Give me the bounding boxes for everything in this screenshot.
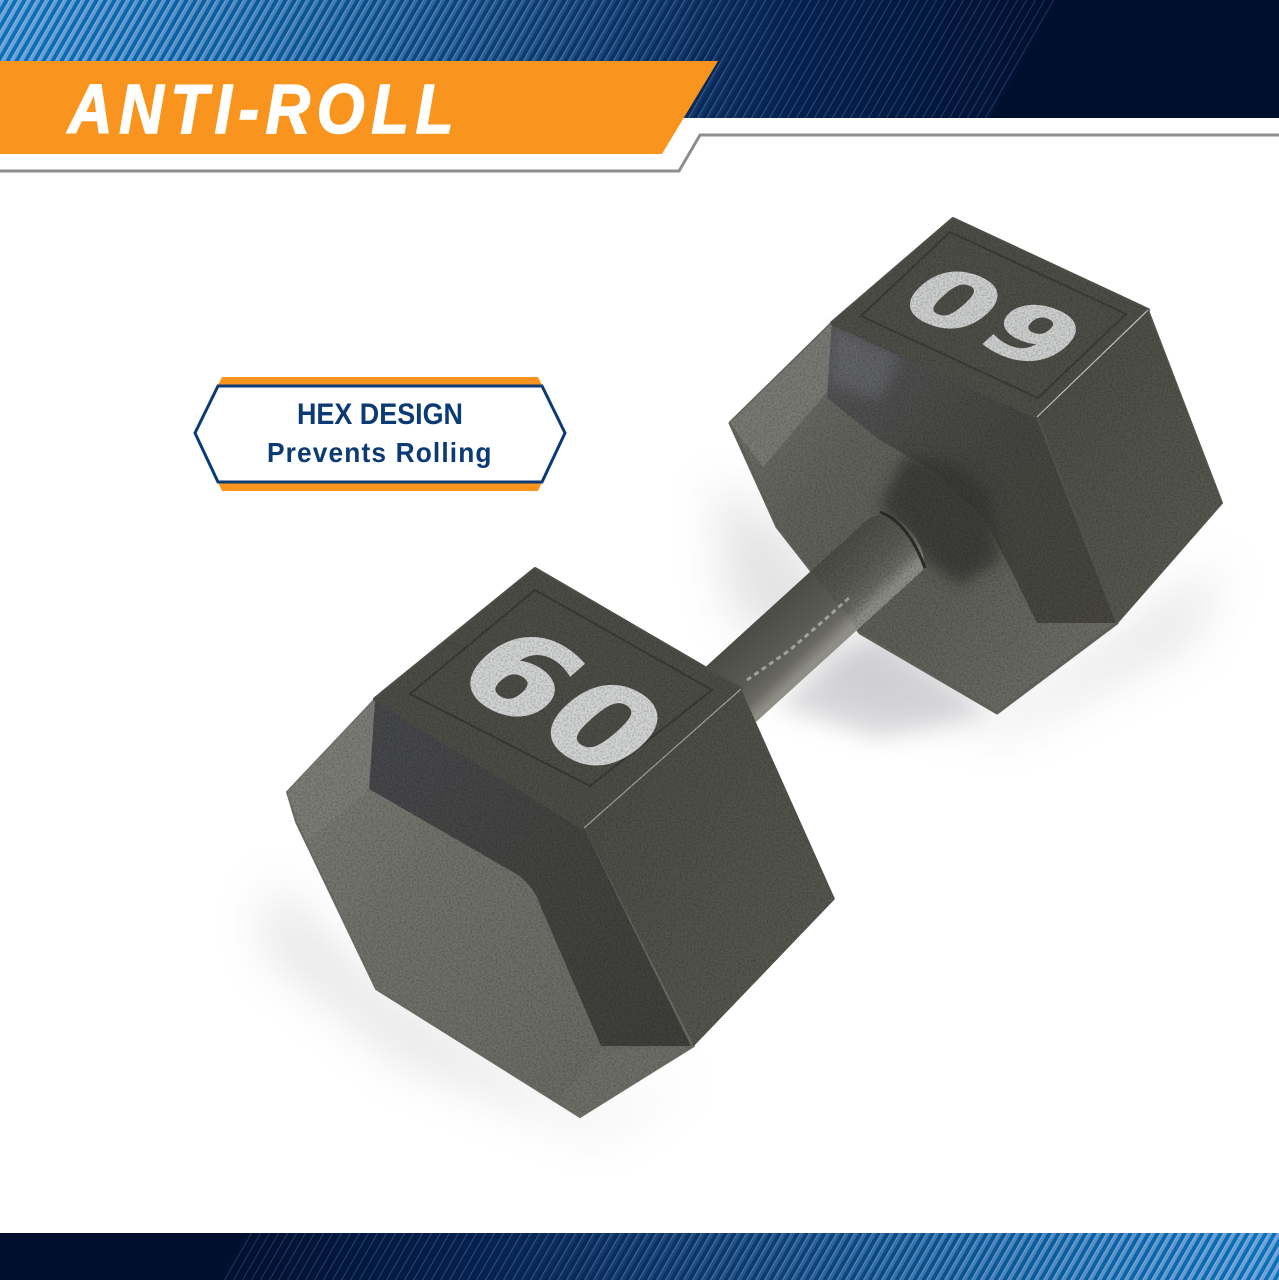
callout subheading: Prevents Rolling [267,436,493,468]
upper head chamfer [827,323,1117,623]
lower head left facet [287,699,375,842]
bar [700,512,925,732]
bar glint [747,597,850,680]
upper head chamfer sheen [830,325,900,400]
lower head top face [375,569,741,828]
callout [195,377,565,491]
cast iron texture [287,219,1222,1117]
bar socket [880,512,925,568]
upper hex head [730,219,1222,713]
callout hexagon [195,386,565,482]
lower head number: 60 [426,604,699,800]
upper head side face [1037,310,1222,623]
title banner [0,61,718,154]
upper head recess [861,232,1126,398]
floor shadows [265,480,1225,1135]
lower head side face [584,689,835,1046]
upper head top face [832,219,1148,417]
header band [0,0,1279,118]
callout orange bars [218,377,542,491]
lower head chamfer [369,699,691,1046]
dumbbell [287,219,1222,1117]
lower head recess [410,590,712,786]
lower hex head [287,569,835,1117]
header white notch [0,118,1279,170]
lower head edge highlight [584,689,741,828]
footer band [0,1233,1279,1280]
header grey outline [0,135,1279,171]
upper head left facet [730,323,832,467]
callout heading: HEX DESIGN [297,398,463,431]
title text: ANTI-ROLL [66,69,460,148]
upper head end face [730,323,1117,713]
upper head edge highlight [1037,310,1148,417]
lower head end face [287,699,694,1117]
upper head number: 60 [874,245,1110,383]
lower head bottom facet [556,1046,691,1117]
upper head hub shading [880,455,1000,585]
